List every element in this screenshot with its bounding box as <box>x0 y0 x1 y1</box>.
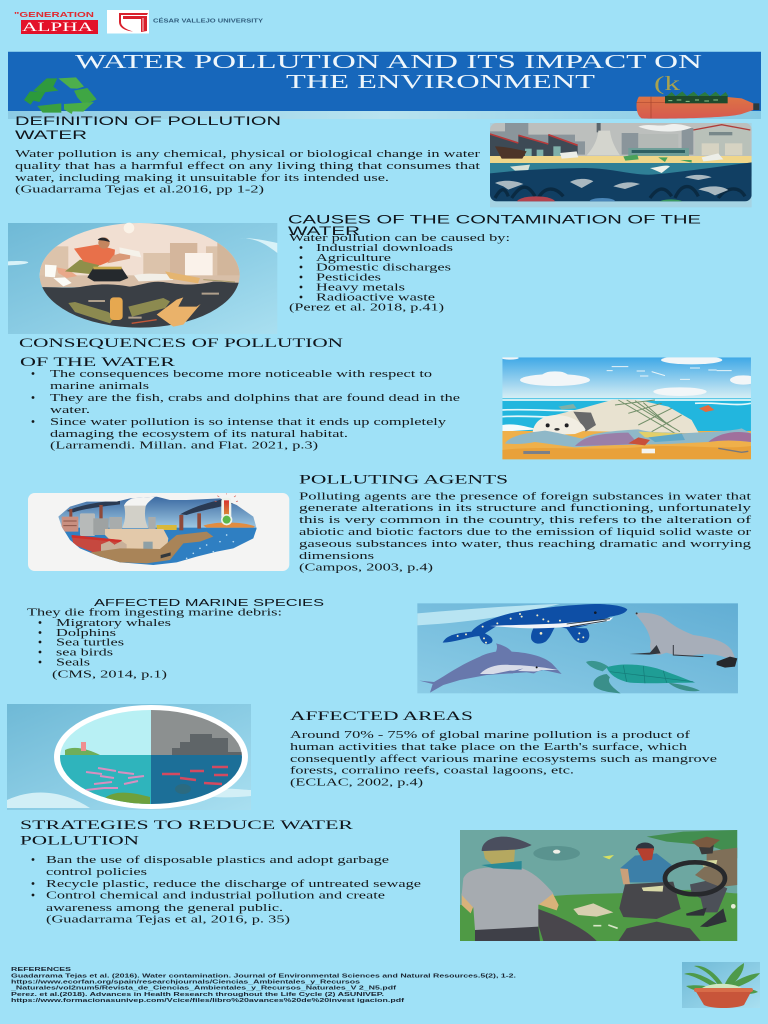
text block: definition: Water pollution is any chemical, physical or biological change in water <box>15 149 481 160</box>
text block: consequences: marine animals <box>50 381 149 392</box>
text block: affected areas: Around 70% - 75% of global marine pollution is a product of <box>290 730 691 741</box>
text block: polluting agents: generate alterations in its structure and functioning, unfortunately <box>299 503 752 514</box>
text block: polluting agents: abiotic and biotic factors due to the emission of liquid solid waste or <box>299 527 752 538</box>
text block: affected areas: consequently affect various marine ecosystems such as mangrove <box>290 754 718 765</box>
text block: marine species: They die from ingesting marine debris: <box>27 608 282 618</box>
text block: polluting agents: gaseous substances into water, thus reaching dramatic and worrying <box>299 539 752 550</box>
text block: polluting agents: this is very common in the country, this refers to the alteration of <box>299 515 752 526</box>
seal <box>629 612 737 668</box>
image: clean vs polluted sea circle <box>7 704 251 810</box>
text block: definition: water, including making it unsuitable for its intended use. <box>15 173 389 184</box>
text block: references: _Naturales/vol2num5/Revista_de_Ciencias_Ambientales_y_Recursos_Naturales_V 2_N5.pdf <box>9 986 396 992</box>
text block: strategies: Ban the use of disposable plastics and adopt garbage <box>46 855 390 866</box>
text block: definition <box>15 149 481 196</box>
image: factories discharging into water <box>28 493 289 571</box>
text block: strategies: Control chemical and industrial pollution and create <box>46 890 386 902</box>
text block: causes: Agriculture <box>316 253 392 264</box>
logo: Cesar Vallejo University <box>107 10 263 34</box>
logo: Generation Alpha: "GENERATION <box>14 10 94 19</box>
text block: marine species: Seals <box>56 658 90 668</box>
icon: recycle symbol <box>24 77 97 114</box>
text block: consequences: They are the fish, crabs and dolphins that are found dead in the <box>50 393 461 404</box>
person 3 with tyre <box>665 837 737 927</box>
text block: references <box>9 967 517 1004</box>
image: marine animals <box>417 603 738 693</box>
image: polluted coast and factories <box>490 123 752 208</box>
logo: Generation Alpha <box>14 10 98 34</box>
text block: causes: Pesticides <box>316 272 381 284</box>
text block: affected areas: forests, corralino reefs, coastal lagoons, etc. <box>290 766 574 776</box>
text block: definition: (Guadarrama Tejas et al.2016, pp 1-2) <box>15 184 265 196</box>
text block: consequences <box>32 369 461 452</box>
title: THE ENVIRONMENT <box>286 72 595 93</box>
text: (k: (k <box>654 73 680 95</box>
image: seal tangled in net on beach <box>501 356 757 459</box>
text block: marine species: Sea turtles <box>56 638 124 648</box>
text block: causes: (Perez et al. 2018, p.41) <box>289 302 445 314</box>
plastic waste in sea <box>68 294 219 327</box>
person 2 <box>619 843 681 919</box>
text block: consequences: water. <box>50 405 90 416</box>
image: potted plant <box>682 962 760 1008</box>
heading: definition of pollution water: WATER <box>15 128 88 142</box>
heading: strategies: STRATEGIES TO REDUCE WATER <box>20 817 354 832</box>
logo: Generation Alpha: ALPHA <box>22 20 93 34</box>
text block: causes: Radioactive waste <box>316 292 436 304</box>
text block: consequences: Since water pollution is so intense that it ends up completely <box>50 417 447 428</box>
title banner <box>8 51 761 119</box>
text block: polluting agents <box>299 492 752 574</box>
text block: strategies: control policies <box>46 867 147 878</box>
text block: causes: Industrial downloads <box>316 243 453 254</box>
text block: consequences: (Larramendi. Millan. and Flat. 2021, p.3) <box>50 440 319 452</box>
text block: consequences: The consequences become more noticeable with respect to <box>50 369 432 380</box>
image: people collecting waste <box>460 830 737 941</box>
text block: causes: Water pollution can be caused by: <box>289 233 510 244</box>
text block: causes <box>289 233 510 314</box>
text block: marine species: Migratory whales <box>56 618 171 629</box>
title: WATER POLLUTION AND ITS IMPACT ON <box>75 52 702 73</box>
heading: consequences of pollution of the water: OF THE WATER <box>20 354 176 369</box>
text block: polluting agents: Polluting agents are the presence of foreign substances in water that <box>299 492 751 502</box>
text block: strategies: (Guadarrama Tejas et al, 2016, p. 35) <box>46 914 291 926</box>
text block: causes: Heavy metals <box>316 282 405 294</box>
text block: definition: quality that has a harmful effect on any living thing that consumes that <box>15 161 480 172</box>
text block: references: Guadarrama Tejas et al. (2016). Water contamination. Journal of Environmental Sciences and Natural Resources.5(2), 1-2. <box>11 974 517 980</box>
logo: Cesar Vallejo University: CÉSAR VALLEJO UNIVERSITY <box>153 16 263 24</box>
heading: affected areas: AFFECTED AREAS <box>290 708 473 723</box>
heading: causes of the contamination <box>288 212 701 238</box>
title <box>75 52 702 93</box>
heading: causes of the contamination: WATER <box>288 224 361 238</box>
text block: marine species: sea birds <box>56 648 113 658</box>
heading: consequences of pollution of the water: CONSEQUENCES OF POLLUTION <box>19 335 344 350</box>
text block: consequences: damaging the ecosystem of its natural habitat. <box>50 429 348 440</box>
rubbish <box>573 903 613 917</box>
text block: marine species: Dolphins <box>56 628 116 639</box>
text block: references: REFERENCES <box>11 967 71 973</box>
text block: strategies: awareness among the general public. <box>46 903 283 914</box>
heading: strategies <box>20 817 354 848</box>
dolphin <box>419 643 562 693</box>
text block: polluting agents: (Campos, 2003, p.4) <box>299 562 434 574</box>
text block: affected areas: (ECLAC, 2002, p.4) <box>290 778 424 788</box>
text block: strategies <box>32 855 422 926</box>
text block: references: https://www.ecorfan.org/spain/researchjournals/Ciencias_Ambientales_y_Recursos <box>11 980 360 986</box>
text block: marine species <box>27 608 282 680</box>
text block: strategies: Recycle plastic, reduce the discharge of untreated sewage <box>46 879 422 890</box>
whale <box>443 604 627 644</box>
heading: affected marine species: AFFECTED MARINE SPECIES <box>94 597 324 609</box>
text block: references: Perez. et al.(2018). Advances in Health Research throughout the Life Cycle (2) ASUNIVEP. <box>11 992 385 998</box>
heading: causes of the contamination: CAUSES OF THE CONTAMINATION OF THE <box>288 212 701 226</box>
icon: bottle planter <box>636 91 759 119</box>
text block: affected areas: human activities that take place on the Earth's surface, which <box>290 742 688 753</box>
image: person throwing plastic waste <box>8 221 277 334</box>
text block: polluting agents: dimensions <box>299 551 374 562</box>
heading: definition of pollution water <box>15 114 281 142</box>
text block: causes: Domestic discharges <box>316 262 451 274</box>
text block: affected areas <box>290 730 718 788</box>
heading: definition of pollution water: DEFINITION OF POLLUTION <box>15 114 281 128</box>
person 1 <box>462 837 597 941</box>
heading: polluting agents: POLLUTING AGENTS <box>299 472 508 486</box>
text block: marine species: (CMS, 2014, p.1) <box>52 670 168 680</box>
text block: references: https://www.formacionasunivep.com/Vcice/files/libro%20avances%20de%20invest igacion.pdf <box>11 998 404 1004</box>
heading: strategies: POLLUTION <box>20 832 140 848</box>
turtle <box>586 661 700 693</box>
person <box>57 237 141 281</box>
heading: consequences of pollution of the water <box>19 335 344 369</box>
